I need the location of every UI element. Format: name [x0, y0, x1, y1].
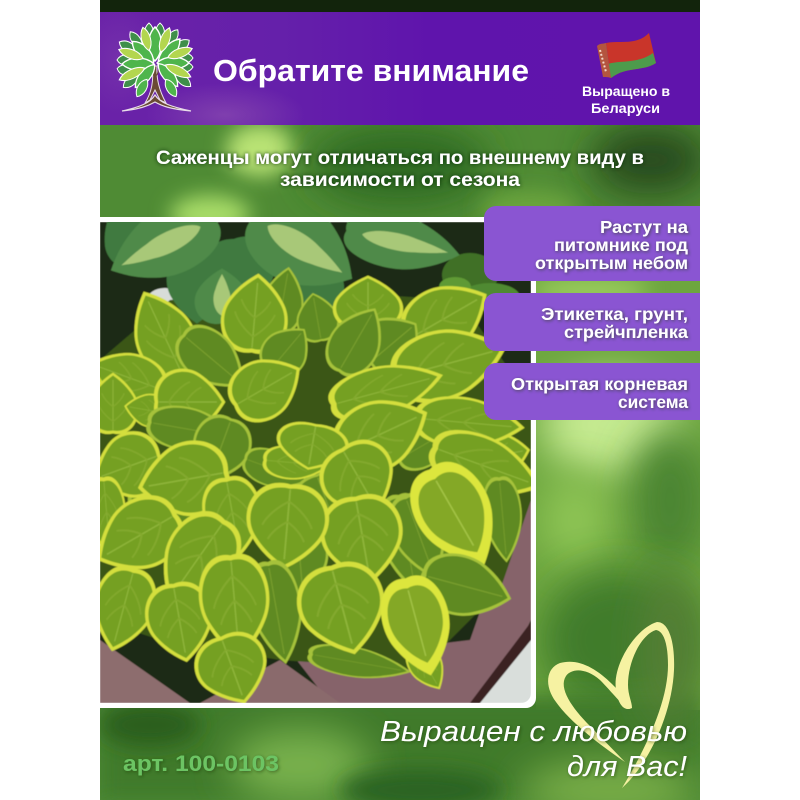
- photo frame: [100, 217, 536, 708]
- notice text: [156, 148, 644, 191]
- title: Обратите внимание: [213, 53, 529, 88]
- callout: nursery: [484, 206, 700, 281]
- callout: label, soil, stretch film: [484, 293, 700, 351]
- callout: nursery: питомнике под: [554, 235, 688, 255]
- article number: арт. 100-0103: [123, 751, 279, 776]
- callout: label, soil, stretch film: стрейчпленка: [564, 322, 688, 342]
- callout: nursery: открытым небом: [535, 253, 688, 273]
- callout: label, soil, stretch film: Этикетка, грунт,: [541, 304, 688, 324]
- flag caption: Выращено в: [582, 83, 670, 99]
- callout: open root system: система: [618, 392, 688, 412]
- slogan: Выращен с любовью: [380, 716, 687, 748]
- icon: heart: [548, 622, 674, 788]
- photo: hosta plant: [100, 222, 531, 703]
- icon: tree logo: [116, 23, 194, 111]
- icon: Belarus flag: [597, 33, 656, 78]
- page background: [100, 0, 710, 800]
- notice text: зависимости от сезона: [280, 170, 520, 191]
- slogan: [380, 716, 687, 783]
- callout: open root system: Открытая корневая: [511, 374, 688, 394]
- flag caption: [582, 83, 670, 116]
- callout: open root system: [484, 363, 700, 420]
- callout: nursery: Растут на: [600, 217, 688, 237]
- flag caption: Беларуси: [591, 100, 660, 116]
- notice text: Саженцы могут отличаться по внешнему виду в: [156, 148, 644, 169]
- slogan: для Вас!: [567, 751, 687, 783]
- header band: [100, 12, 700, 125]
